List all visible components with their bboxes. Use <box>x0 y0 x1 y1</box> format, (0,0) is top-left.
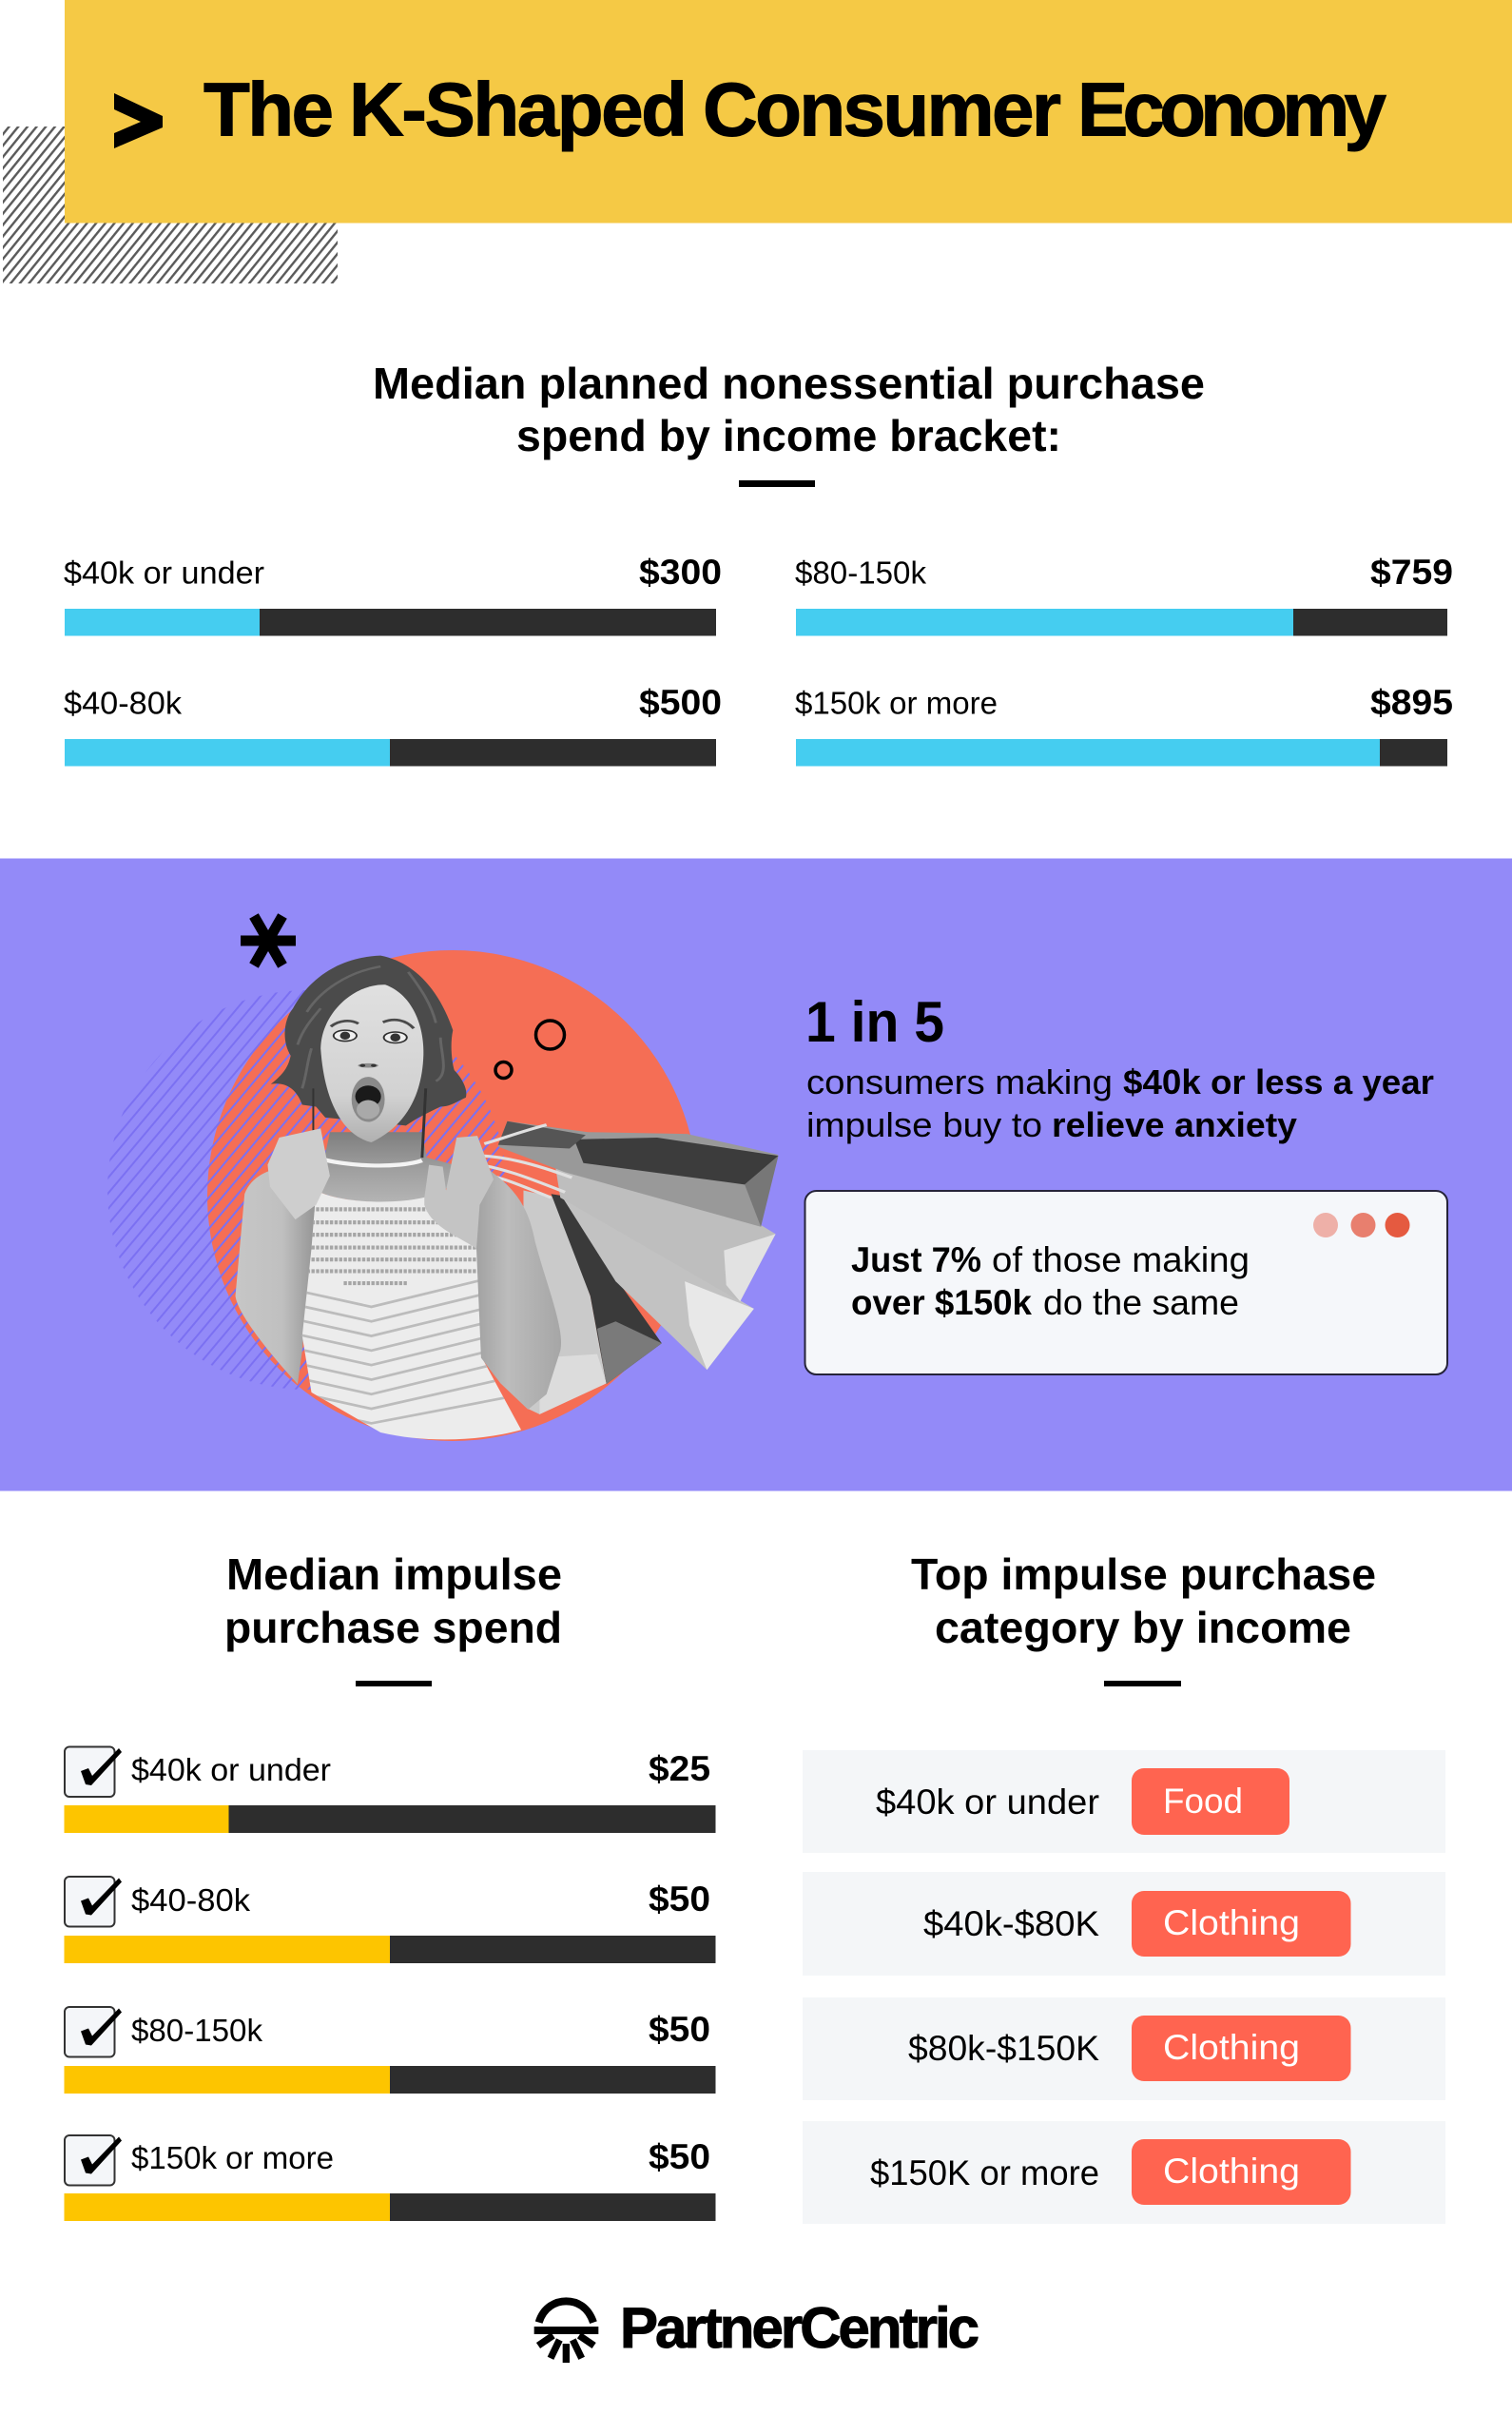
stat: 1 in 5: 1 in 5 <box>805 990 944 1054</box>
neck and chest <box>283 1132 468 1202</box>
table row: $80k-$150K, Clothing <box>803 1997 1445 2100</box>
heading: median planned nonessential purchase spend: spend by income bracket: <box>516 411 1061 460</box>
heading: median impulse purchase spend: Median impulse <box>226 1549 562 1599</box>
heading: median planned nonessential purchase spend: Median planned nonessential purchase <box>373 359 1205 408</box>
arm: viewer left <box>236 1169 320 1384</box>
mouth <box>352 1077 385 1122</box>
eyes <box>333 1029 408 1043</box>
table row: $150K or more, Clothing: $150K or more <box>870 2153 1099 2192</box>
hand: viewer right <box>424 1136 494 1249</box>
icon: window dots <box>1313 1213 1409 1237</box>
hatched decoration behind banner <box>3 127 338 283</box>
checklist row: $80-150k <box>65 2007 715 2094</box>
logo: PartnerCentric: PartnerCentric <box>620 2296 979 2360</box>
arm: viewer right <box>455 1165 561 1410</box>
bar chart: planned spend $40k or under <box>64 553 722 635</box>
title banner <box>65 0 1512 223</box>
table row: $80k-$150K, Clothing: Clothing <box>1163 2028 1300 2067</box>
face <box>320 984 423 1142</box>
illustration: shopper <box>107 916 779 1441</box>
orange circle <box>207 950 698 1441</box>
title <box>204 67 1386 152</box>
icon: asterisk <box>241 916 296 965</box>
checklist row: $150k or more: $150k or more <box>131 2140 334 2175</box>
callout text: of those making <box>992 1240 1250 1279</box>
bar chart: planned spend $150k or more <box>795 683 1453 767</box>
shopping bags <box>466 1121 779 1414</box>
heading: median impulse purchase spend <box>224 1549 562 1686</box>
checklist row: $40k or under <box>65 1746 715 1833</box>
heading: top impulse purchase category: Top impulse purchase <box>911 1549 1376 1599</box>
checklist row: $40-80k: $40-80k <box>131 1882 251 1918</box>
icon: small ring <box>495 1062 512 1079</box>
checklist row: $80-150k: $50 <box>649 2010 710 2049</box>
icon: chevron arrow <box>114 93 163 148</box>
bar chart: planned spend $80-150k <box>795 553 1453 635</box>
stat: 1 in 5: relieve anxiety <box>1052 1105 1297 1144</box>
table row: $40k or under, Food <box>803 1750 1445 1853</box>
callout text <box>851 1240 1250 1322</box>
stat: 1 in 5: consumers making <box>806 1062 1113 1101</box>
heading: median impulse purchase spend: purchase spend <box>224 1603 562 1652</box>
bar chart: planned spend $40-80k: $500 <box>639 683 722 722</box>
title: Economy <box>1077 67 1386 152</box>
callout text: over $150k <box>851 1283 1032 1322</box>
stat: 1 in 5: $40k or less a year <box>1123 1062 1434 1101</box>
checklist row: $40-80k <box>65 1877 715 1963</box>
hatched circle <box>107 990 507 1390</box>
heading: top impulse purchase category: category by income <box>935 1603 1351 1652</box>
bar chart: planned spend $80-150k: $759 <box>1370 553 1453 592</box>
table row: $150K or more, Clothing: Clothing <box>1163 2152 1300 2191</box>
callout text: Just 7% <box>851 1240 981 1279</box>
title: The <box>204 67 334 152</box>
checklist row: $40k or under: $40k or under <box>131 1752 331 1787</box>
icon: sunrise mark <box>534 2301 598 2363</box>
hand: viewer left <box>267 1128 330 1219</box>
stat: 1 in 5: impulse buy to <box>806 1105 1042 1144</box>
checklist row: $150k or more <box>65 2135 715 2221</box>
bar chart: planned spend $40k or under: $40k or under <box>64 555 264 590</box>
nose <box>358 1063 378 1067</box>
title: Consumer <box>703 67 1061 152</box>
checklist row: $150k or more: $50 <box>649 2137 710 2176</box>
checklist row: $80-150k: $80-150k <box>131 2013 262 2048</box>
hair <box>271 956 466 1125</box>
table row: $80k-$150K, Clothing: $80k-$150K <box>908 2029 1099 2068</box>
bar chart: planned spend $150k or more: $150k or more <box>795 685 998 721</box>
table row: $150K or more, Clothing <box>803 2121 1445 2224</box>
heading: top impulse purchase category <box>911 1549 1376 1686</box>
bar chart: planned spend $40k or under: $300 <box>639 553 722 592</box>
eyebrows <box>331 1020 414 1028</box>
checklist row: $40k or under: $25 <box>649 1749 710 1788</box>
table row: $40k or under, Food: $40k or under <box>876 1782 1099 1821</box>
table row: $40k or under, Food: Food <box>1163 1782 1243 1821</box>
checklist row: $40-80k: $50 <box>649 1880 710 1919</box>
callout text: do the same <box>1043 1283 1239 1322</box>
panel: anxiety band <box>0 858 1512 1491</box>
bar chart: planned spend $150k or more: $895 <box>1370 683 1453 722</box>
bar chart: planned spend $40-80k <box>64 683 722 767</box>
bar chart: planned spend $80-150k: $80-150k <box>795 555 926 590</box>
woman and bags <box>236 956 779 1439</box>
icon: large ring <box>536 1021 565 1049</box>
bar chart: planned spend $40-80k: $40-80k <box>64 685 183 721</box>
table row: $40k-$80K, Clothing: $40k-$80K <box>923 1904 1099 1943</box>
table row: $40k-$80K, Clothing: Clothing <box>1163 1903 1300 1942</box>
callout card <box>804 1191 1447 1374</box>
striped top <box>288 1190 523 1439</box>
title: K-Shaped <box>349 67 688 152</box>
heading: median planned nonessential purchase spend <box>373 359 1205 487</box>
glasses <box>313 1088 426 1165</box>
stat: 1 in 5 <box>805 990 1434 1144</box>
table row: $40k-$80K, Clothing <box>803 1872 1445 1976</box>
